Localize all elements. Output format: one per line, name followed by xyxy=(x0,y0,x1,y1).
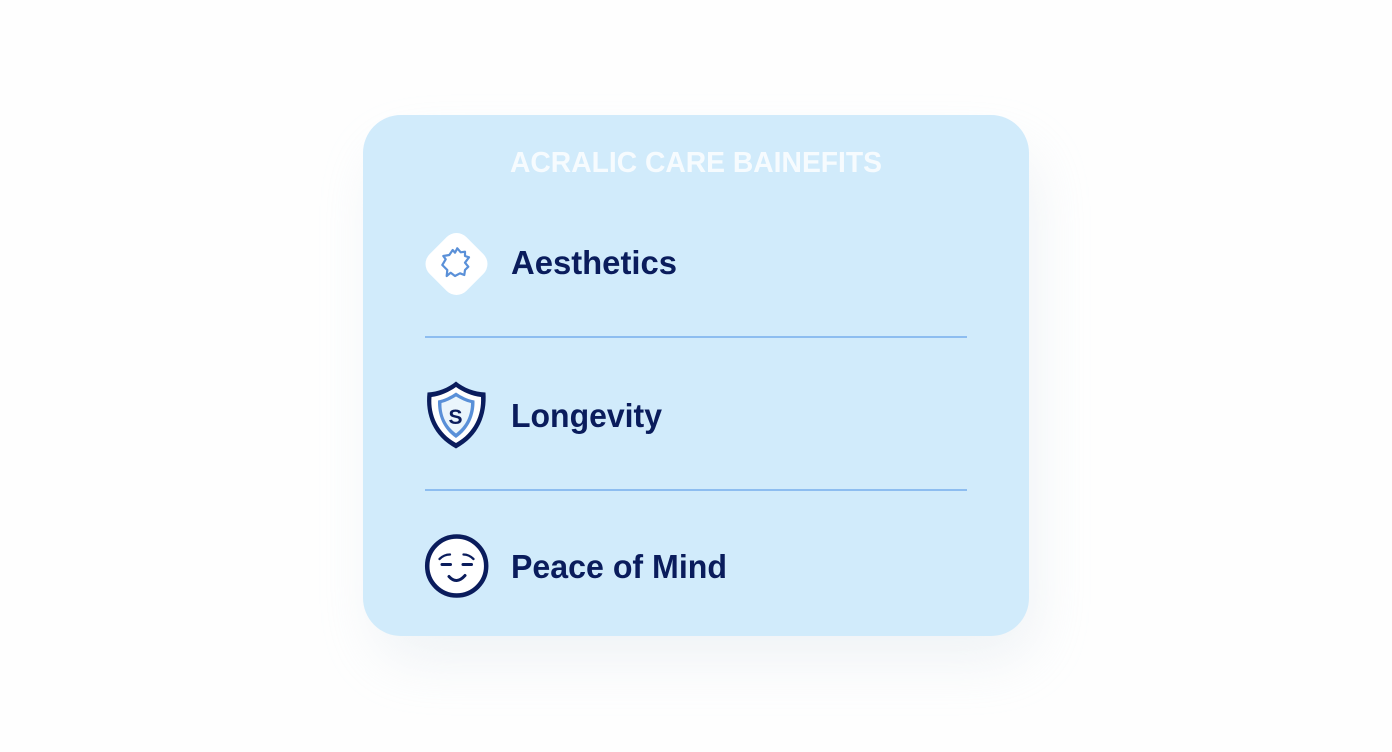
row: peace of mind xyxy=(427,536,727,596)
icon glyph: S: S xyxy=(448,406,463,429)
label: Peace of Mind: Peace of Mind xyxy=(511,548,727,585)
icon: white diamond with star outline xyxy=(420,227,493,301)
label: Longevity: Longevity xyxy=(511,397,663,434)
heading: ACRALIC CARE BAINEFITS xyxy=(510,147,882,179)
row: longevity xyxy=(427,382,663,448)
panel: benefits card xyxy=(363,115,1029,636)
icon: shield xyxy=(427,382,486,448)
row: aesthetics xyxy=(420,227,677,301)
icon: calm face xyxy=(427,536,486,596)
label: Aesthetics: Aesthetics xyxy=(511,244,677,281)
